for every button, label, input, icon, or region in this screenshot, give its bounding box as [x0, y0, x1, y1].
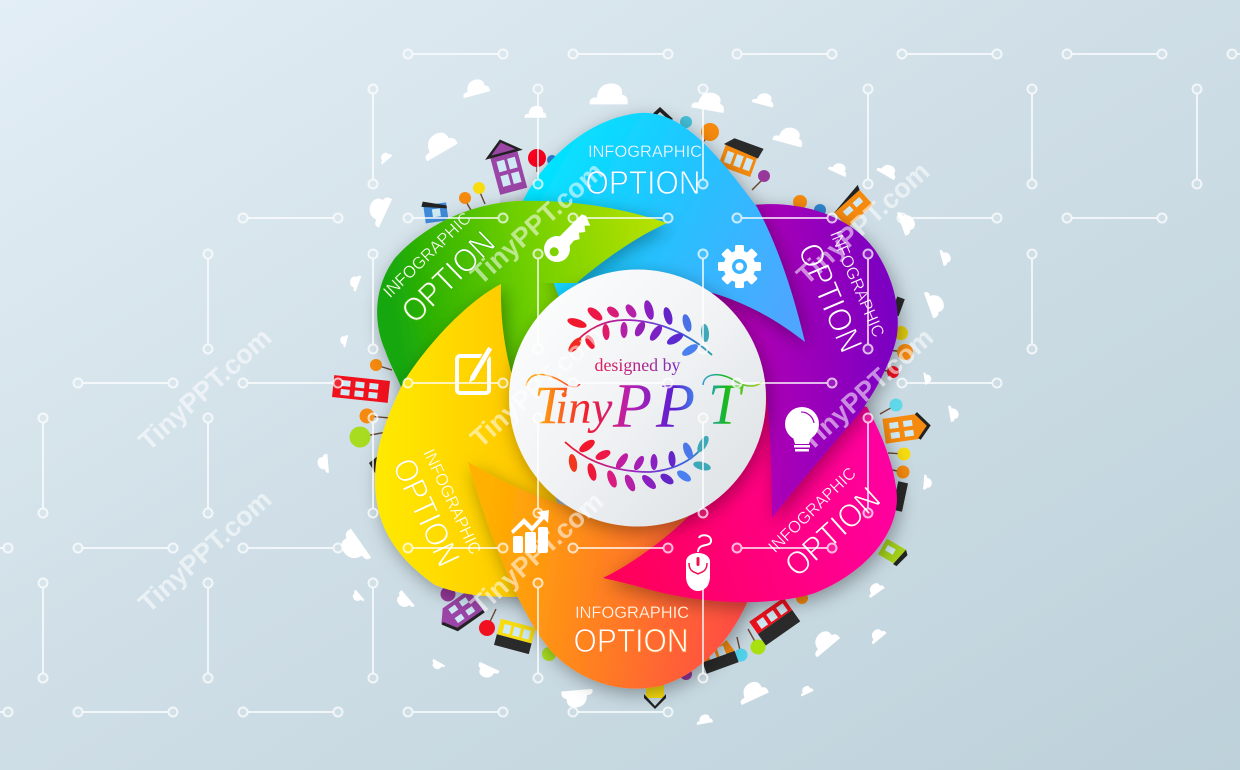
petal: green tip over cyan — [500, 194, 672, 283]
script wordmark: Tiny PPT: T — [534, 375, 568, 435]
option text: purple: OPTION — [791, 237, 870, 358]
petal: orange — [468, 462, 747, 689]
icon: light bulb — [785, 407, 819, 452]
clouds around the wheel — [317, 77, 960, 725]
watermarks: TinyPPT.com — [465, 319, 609, 454]
option text: pink: INFOGRAPHIC — [765, 464, 860, 556]
option text: yellow: OPTION — [385, 452, 467, 572]
designed by: designed by — [594, 355, 680, 375]
icon: tablet and pen — [457, 346, 493, 393]
watermarks: TinyPPT.com — [133, 484, 277, 619]
option text: cyan — [586, 142, 702, 201]
watermarks: TinyPPT.com — [795, 322, 939, 457]
option text: cyan: OPTION — [586, 164, 700, 201]
icon: gear — [718, 245, 761, 288]
option text: green: OPTION — [394, 223, 502, 330]
houses around the wheel — [332, 107, 931, 709]
petal: cyan — [523, 113, 805, 342]
option text: orange: INFOGRAPHIC — [575, 603, 689, 622]
watermarks — [133, 156, 939, 621]
script wordmark: Tiny PPT: P — [655, 370, 695, 441]
icon: key — [539, 209, 597, 267]
icon: growth chart — [511, 510, 549, 553]
option text: pink: OPTION — [777, 479, 887, 584]
top wreath — [566, 299, 712, 358]
watermarks: TinyPPT.com — [465, 156, 609, 291]
script wordmark: Tiny PPT: P — [612, 370, 652, 441]
option text: orange — [574, 603, 689, 659]
option text: purple: INFOGRAPHIC — [826, 228, 888, 340]
option text: cyan: INFOGRAPHIC — [588, 142, 702, 161]
bottom wreath — [565, 434, 712, 493]
watermarks: TinyPPT.com — [791, 156, 935, 291]
icon: computer mouse — [686, 535, 711, 591]
watermarks: TinyPPT.com — [133, 322, 277, 457]
script wordmark: Tiny PPT — [526, 370, 762, 441]
center logo — [526, 299, 762, 493]
petal: purple — [700, 204, 898, 518]
center circle — [509, 270, 766, 526]
petal: yellow — [375, 284, 560, 597]
watermarks: TinyPPT.com — [465, 486, 609, 621]
option text: orange: OPTION — [574, 622, 688, 659]
option text: green: INFOGRAPHIC — [380, 209, 475, 301]
option text: yellow: INFOGRAPHIC — [419, 446, 485, 557]
trees around the wheel — [350, 116, 913, 680]
petal: green — [377, 201, 667, 400]
script wordmark: Tiny PPT: T — [708, 372, 744, 437]
script wordmark: Tiny PPT: iny — [555, 382, 613, 434]
petal: pink — [603, 380, 897, 602]
